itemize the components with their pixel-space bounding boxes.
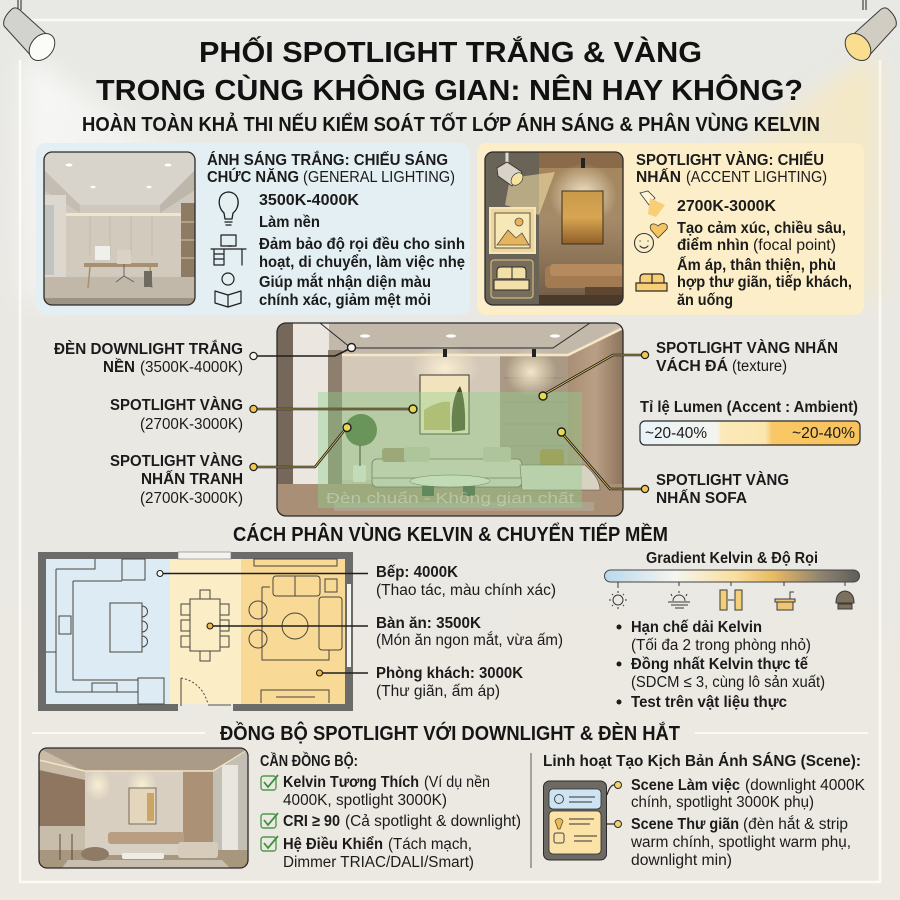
list: kelvin tips: Hạn chế dải Kelvin	[631, 619, 762, 636]
watermark	[318, 392, 582, 508]
heading: scenes: Linh hoạt Tạo Kịch Bản Ánh SÁNG (Scene):	[543, 753, 861, 770]
text: emotion: Tạo cảm xúc, chiều sâu,	[677, 220, 846, 237]
text: work scene: (downlight 4000K	[745, 777, 866, 794]
icons: gradient scale	[609, 582, 854, 610]
label: white downlight	[54, 339, 243, 376]
text: relax scene: warm chính, spotlight warm phụ,	[630, 834, 851, 851]
label: spotlight on painting: (2700K-3000K)	[140, 490, 243, 507]
marker dots	[157, 570, 368, 676]
icon: smile with heart	[634, 224, 667, 252]
label: spotlight on sofa: NHẤN SOFA	[656, 488, 747, 507]
heading: CHỨC NĂNG	[207, 167, 299, 186]
photo: accent lit wall	[485, 152, 623, 305]
label: warm spotlight: (2700K-3000K)	[140, 416, 243, 433]
text: warmth: ăn uống	[677, 292, 733, 309]
title	[96, 35, 803, 107]
zone: living room	[241, 559, 345, 704]
label: spotlight on stone wall: (texture)	[732, 358, 787, 375]
text: 3500K: 3500K-4000K	[259, 192, 360, 209]
zone: kitchen	[46, 559, 170, 704]
chart: lumen ratio bar: ~20-40%	[645, 425, 707, 442]
title: TRONG CÙNG KHÔNG GIAN: NÊN HAY KHÔNG?	[96, 73, 803, 107]
text: relax scene: downlight min)	[631, 852, 732, 869]
item: kelvin	[261, 774, 490, 809]
heading	[636, 150, 827, 186]
label: white downlight: (3500K-4000K)	[140, 359, 243, 376]
item: control: Dimmer TRIAC/DALI/Smart)	[283, 854, 474, 871]
label: spotlight on stone wall: VÁCH ĐÁ	[656, 356, 728, 375]
list: kelvin tips: Đồng nhất Kelvin thực tế	[631, 656, 808, 673]
item: cri: (Cả spotlight & downlight)	[345, 813, 521, 830]
item: cri	[261, 813, 521, 830]
label: spotlight on painting: SPOTLIGHT VÀNG	[110, 451, 243, 470]
zone label: kitchen	[376, 564, 556, 599]
zone label: living room	[376, 665, 524, 700]
text: color recognition: Giúp mắt nhận diện màu	[259, 273, 431, 291]
chart: lumen ratio bar	[640, 421, 860, 445]
text: relax scene: Scene Thư giãn	[631, 816, 739, 833]
icon: desk	[211, 235, 246, 265]
list: kelvin tips	[616, 619, 825, 711]
heading: SPOTLIGHT VÀNG: CHIẾU	[636, 150, 824, 169]
label: white downlight: ĐÈN DOWNLIGHT TRẮNG	[54, 339, 243, 358]
label: spotlight on stone wall: SPOTLIGHT VÀNG NHẤN	[656, 338, 838, 357]
item: kelvin: 4000K, spotlight 3000K)	[283, 792, 447, 809]
text: color recognition: chính xác, giảm mệt mỏi	[259, 292, 431, 309]
label: white downlight: NỀN	[103, 357, 135, 376]
title: PHỐI SPOTLIGHT TRẮNG & VÀNG	[199, 35, 702, 69]
photo: office with downlights	[44, 152, 195, 305]
text: even illumination	[259, 236, 465, 271]
heading	[207, 150, 455, 186]
item: control: (Tách mạch,	[388, 836, 472, 853]
zone label: kitchen: (Thao tác, màu chính xác)	[376, 582, 556, 599]
watermark: Đèn chuẩn - Không gian chất	[326, 490, 575, 507]
heading: NHẤN	[636, 167, 681, 186]
heading: kelvin gradient: Gradient Kelvin & Độ Rọi	[646, 550, 818, 567]
item: kelvin: Kelvin Tương Thích	[283, 774, 419, 791]
text: color recognition	[259, 273, 431, 309]
text: relax scene: (đèn hắt & strip	[743, 816, 848, 833]
icon: scene control panel	[544, 781, 622, 860]
divider lines	[32, 732, 868, 734]
text: warmth: hợp thư giãn, tiếp khách,	[677, 274, 852, 291]
heading: kelvin zoning: CÁCH PHÂN VÙNG KELVIN & CHUYỂN TIẾP MỀM	[233, 522, 668, 546]
leader lines: left	[250, 344, 417, 471]
item: cri: CRI ≥ 90	[283, 813, 340, 830]
light beam: white	[18, 55, 200, 300]
item: kelvin: (Ví dụ nền	[424, 774, 490, 791]
chart: kelvin gradient bar	[604, 570, 860, 582]
icon: white spotlight	[4, 0, 60, 66]
heading: must sync: CẦN ĐỒNG BỘ:	[260, 752, 358, 770]
photo: synced living room	[39, 748, 248, 868]
text: even illumination: hoạt, di chuyển, làm việc nhẹ	[259, 254, 465, 271]
label: warm spotlight	[110, 395, 243, 433]
chart: lumen ratio bar: ~20-40%	[792, 425, 855, 442]
text: work scene	[631, 777, 866, 811]
heading: lumen ratio: Tỉ lệ Lumen (Accent : Ambient)	[640, 399, 858, 416]
item: control: Hệ Điều Khiển	[283, 836, 383, 853]
zone: dining	[170, 559, 241, 704]
text: emotion	[677, 220, 846, 254]
light beam: warm	[700, 55, 882, 300]
icon: beam	[640, 191, 665, 217]
text: warmth	[677, 257, 852, 309]
heading: sync: ĐỒNG BỘ SPOTLIGHT VỚI DOWNLIGHT & ĐÈN HẮT	[220, 721, 680, 745]
text: emotion: điểm nhìn	[677, 237, 749, 254]
zone label: dining: Bàn ăn: 3500K	[376, 615, 482, 632]
leader lines: right	[539, 351, 649, 493]
heading: (GENERAL LIGHTING)	[303, 169, 455, 186]
item: control	[261, 836, 474, 871]
label: spotlight on painting	[110, 451, 243, 507]
label: spotlight on sofa: SPOTLIGHT VÀNG	[656, 470, 789, 489]
icon: light bulb	[219, 192, 238, 225]
label: spotlight on painting: NHẤN TRANH	[141, 469, 243, 488]
list: kelvin tips: Test trên vật liệu thực	[631, 694, 787, 711]
text: background: Làm nền	[259, 214, 320, 231]
icon: warm spotlight	[840, 0, 896, 66]
floor plan	[38, 552, 368, 711]
label: warm spotlight: SPOTLIGHT VÀNG	[110, 395, 243, 414]
icon: sofa	[636, 274, 667, 291]
heading: ÁNH SÁNG TRẮNG: CHIẾU SÁNG	[207, 150, 448, 169]
list: kelvin tips: (SDCM ≤ 3, cùng lô sản xuất)	[631, 674, 825, 691]
icon: reader	[215, 273, 241, 307]
zone label: dining	[376, 615, 563, 649]
subtitle: HOÀN TOÀN KHẢ THI NẾU KIỂM SOÁT TỐT LỚP ÁNH SÁNG & PHÂN VÙNG KELVIN	[82, 112, 820, 136]
text: relax scene	[630, 816, 851, 869]
text: emotion: (focal point)	[753, 237, 836, 254]
list: kelvin tips: (Tối đa 2 trong phòng nhỏ)	[631, 637, 811, 654]
text: work scene: Scene Làm việc	[631, 777, 740, 794]
label: spotlight on sofa	[656, 470, 789, 507]
zone label: kitchen: Bếp: 4000K	[376, 564, 459, 581]
label: spotlight on stone wall	[656, 338, 838, 375]
text: work scene: chính, spotlight 3000K phụ)	[631, 794, 814, 811]
text: even illumination: Đảm bảo độ rọi đều cho sinh	[259, 236, 465, 253]
text: warmth: Ấm áp, thân thiện, phù	[677, 257, 836, 274]
zone label: dining: (Món ăn ngon mắt, vừa ấm)	[376, 632, 563, 649]
zone label: living room: (Thư giãn, ấm áp)	[376, 683, 500, 700]
heading: (ACCENT LIGHTING)	[686, 169, 827, 186]
hero photo: living room	[277, 323, 623, 516]
panel: white light	[36, 143, 470, 315]
text: 2700K: 2700K-3000K	[677, 198, 777, 215]
panel: warm spotlight	[477, 143, 864, 315]
zone label: living room: Phòng khách: 3000K	[376, 665, 524, 682]
checklist	[261, 774, 521, 871]
